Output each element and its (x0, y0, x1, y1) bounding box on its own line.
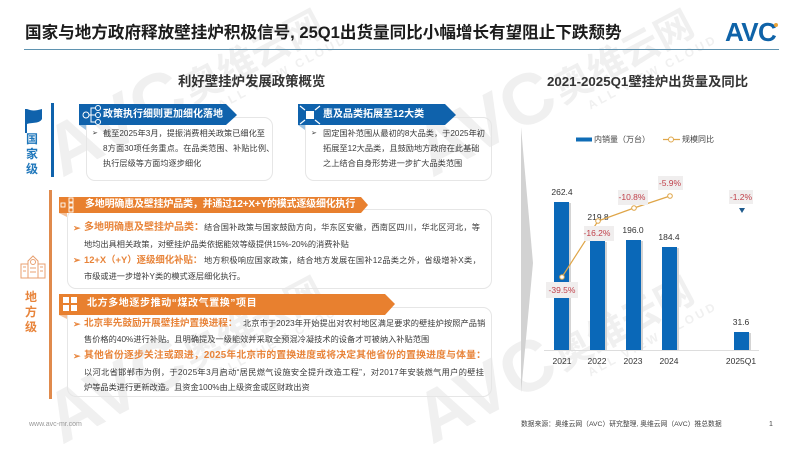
axis labels: 2024 (660, 356, 679, 366)
axis labels: 2021 (553, 356, 572, 366)
heading: chart title: 2021-2025Q1壁挂炉出货量及同比 (547, 74, 748, 89)
banner (59, 197, 368, 217)
panel: local level label (20, 190, 52, 399)
text lines: 拓展至12大品类，且鼓励地方政府在此基础 (323, 144, 479, 153)
text lines: ➢ (73, 351, 81, 361)
value labels: 219.8 (587, 212, 609, 222)
banner (79, 104, 237, 130)
value labels: 262.4 (551, 187, 573, 197)
text lines: 结合国补政策与国家鼓励方向，华东区安徽，西南区四川，华北区河北，等 (204, 223, 480, 232)
banner text: 政策执行细则更加细化落地 (103, 109, 223, 120)
text lines: 北京率先鼓励开展壁挂炉置换进程： (84, 318, 238, 329)
text lines: 多地明确惠及壁挂炉品类： (84, 222, 204, 233)
text lines: 售价格的40%进行补贴。且明确提及一级能效并采取全预混冷凝技术的设备才可被纳入补贴范围 (84, 335, 429, 344)
heading: policy overview: 利好壁挂炉发展政策概览 (178, 74, 325, 89)
text lines (92, 129, 274, 168)
banner text: 惠及品类拓展至12大类 (323, 109, 424, 120)
legend: 内销量（万台） (594, 134, 650, 144)
banner text: 北方多地逐步推动“煤改气置换”项目 (87, 298, 257, 309)
yoy line (560, 194, 672, 279)
yoy labels: -5.9% (659, 178, 682, 188)
axis labels: 2025Q1 (726, 356, 756, 366)
icon: down triangle (739, 208, 745, 213)
text lines: 地方积极响应国家政策，结合地方发展在国补12品类之外，省级增补X类， (204, 256, 481, 265)
axis labels (553, 356, 756, 366)
text lines: 8方面30项任务重点。在品类范围、补贴比例、 (103, 144, 274, 153)
text lines (311, 129, 485, 168)
text lines: 其他省份逐步关注或跟进，2025年北京市的置换进度或将决定其他省份的置换进度与体量： (84, 350, 486, 361)
text lines: 北京市于2023年开始提出对农村地区满足要求的壁挂炉按照产品销 (243, 319, 485, 328)
text lines: ➢ (73, 255, 81, 265)
icon: flag (25, 109, 42, 133)
text lines: 截至2025年3月，提振消费相关政策已细化至 (103, 129, 265, 138)
banner text: 多地明确惠及壁挂炉品类，并通过12+X+Y的模式逐级细化执行 (85, 199, 355, 210)
yoy labels: -39.5% (549, 285, 576, 295)
value labels: 31.6 (733, 317, 750, 327)
text: local level: 地方级 (25, 290, 37, 334)
value labels: 196.0 (622, 225, 644, 235)
logo: AVC: AVC (725, 17, 776, 47)
title: 国家与地方政府释放壁挂炉积极信号, 25Q1出货量同比小幅增长有望阻止下跌颓势 (25, 23, 622, 42)
text lines: 12+X（+Y）逐级细化补贴： (84, 254, 202, 265)
text lines: 地均出具相关政策，对壁挂炉品类依据能效等级提供15%-20%的消费补贴 (84, 240, 349, 249)
banner (59, 294, 395, 319)
yoy labels: -10.8% (619, 192, 646, 202)
panel: local categories (59, 197, 492, 289)
panel: national level label (25, 103, 54, 177)
footer: website: www.avc-mr.com (29, 421, 82, 428)
legend: 规模同比 (682, 134, 714, 144)
panel: policy details (79, 104, 274, 181)
banner (298, 104, 456, 130)
text lines: ➢ (311, 130, 317, 137)
footer: source: 数据来源：奥维云网（AVC）研究整理, 奥维云网（AVC）推总数据 (521, 421, 722, 428)
value labels (551, 187, 750, 327)
icon: building (20, 255, 46, 278)
yoy labels (546, 176, 753, 298)
axis labels: 2022 (588, 356, 607, 366)
text lines: ➢ (73, 223, 81, 233)
text lines: 执行层级等方面均逐步细化 (103, 159, 201, 168)
text lines: ➢ (92, 130, 98, 137)
text: national level: 国家级 (26, 132, 38, 176)
bars (554, 202, 751, 350)
value labels: 184.4 (658, 232, 680, 242)
text lines: 市级或进一步增补Y类的模式逐层细化执行。 (84, 272, 245, 281)
yoy labels: -16.2% (584, 228, 611, 238)
text lines: ➢ (73, 319, 81, 329)
text lines (73, 318, 486, 392)
panel: coal to gas (59, 294, 492, 397)
text lines: 固定国补范围从最初的8大品类，于2025年初 (323, 129, 485, 138)
text lines: 炉等品类进行更新改造。且资金100%由上级资金或区财政出资 (84, 383, 310, 392)
axis labels: 2023 (624, 356, 643, 366)
text lines (73, 221, 481, 281)
text lines: 以河北省邯郸市为例，于2025年3月启动“居民燃气设施安全提升改造工程”，对2017年安装燃气用户的壁挂 (84, 368, 484, 377)
panel: category expansion (298, 104, 492, 181)
yoy labels: -1.2% (730, 192, 753, 202)
page number: 1 (769, 421, 773, 428)
text lines: 之上结合自身形势进一步扩大品类范围 (323, 159, 462, 168)
legend (576, 134, 714, 144)
